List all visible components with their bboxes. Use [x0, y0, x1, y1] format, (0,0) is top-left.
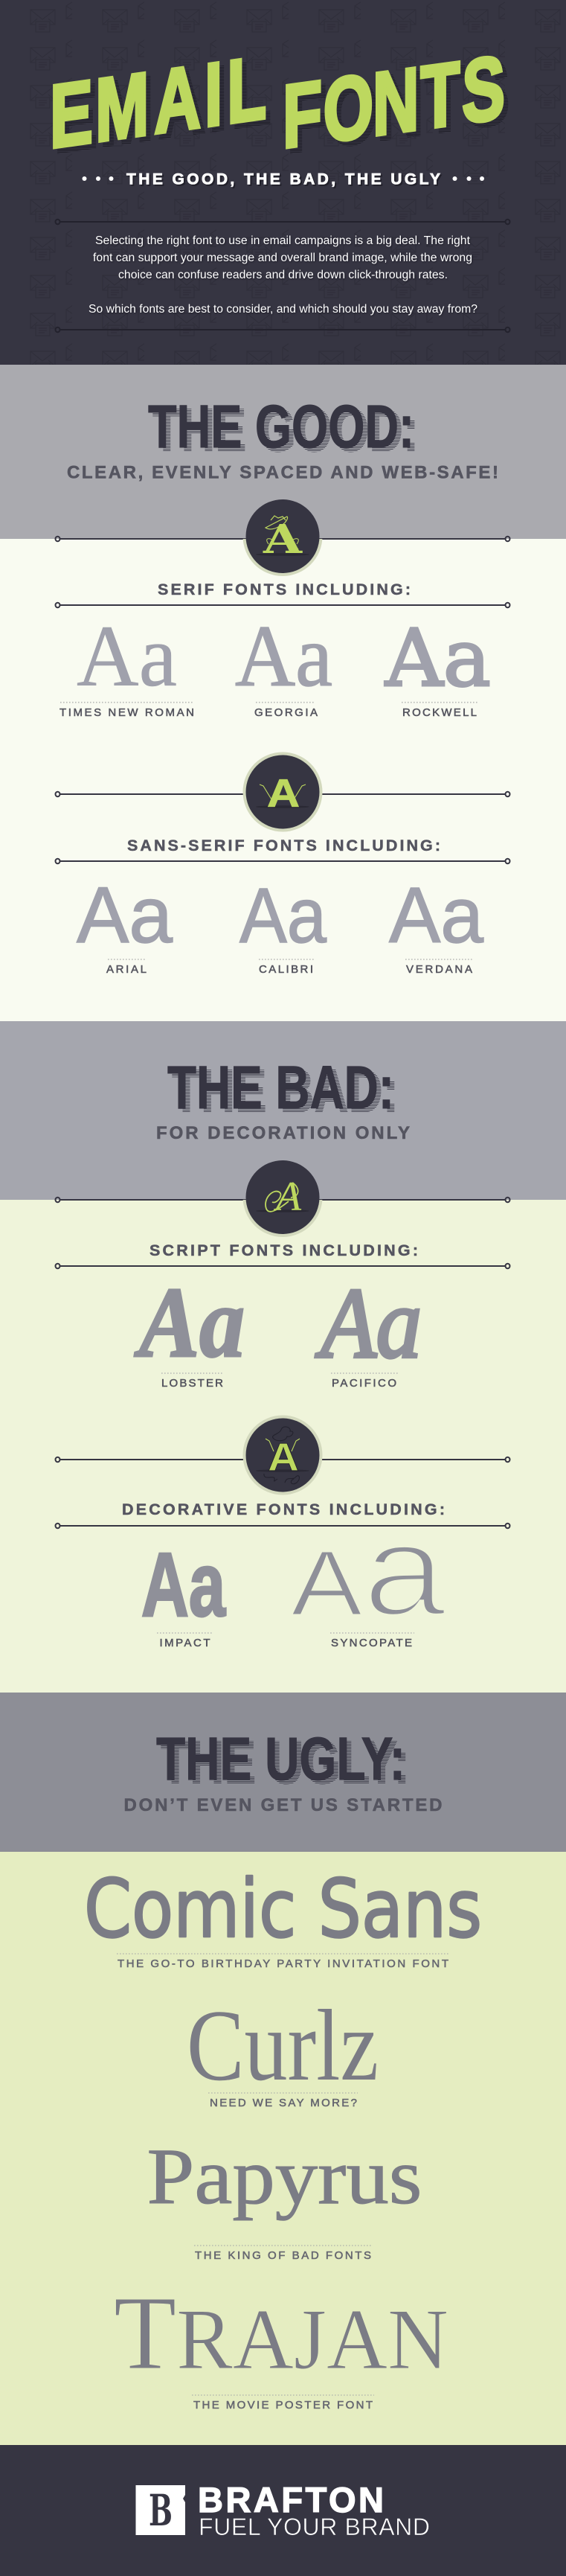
subtitle with dots: THE GOOD, THE BAD, THE UGLY [126, 171, 440, 188]
icon: script A: A [273, 1174, 302, 1220]
sample: Papyrus: Papyrus [147, 2133, 422, 2221]
intro text: So which fonts are best to consider, and which should you stay away from? [89, 303, 477, 316]
sample: Times New Roman: TIMES NEW ROMAN [60, 706, 194, 719]
panel: serif and sans-serif fonts [0, 496, 566, 1021]
panel: footer [0, 2445, 566, 2576]
subheading: don't even get us started: DON’T EVEN GET US STARTED [123, 1795, 442, 1815]
heading: serif fonts: SERIF FONTS INCLUDING: [158, 581, 411, 598]
sample: Comic Sans: Comic Sans [84, 1863, 482, 1956]
intro text: Selecting the right font to use in email campaigns is a big deal. The right [95, 234, 471, 247]
sample: Papyrus [147, 2133, 422, 2262]
title: Email Fonts: EMAIL [50, 38, 266, 167]
sample: Pacifico: Aa [315, 1268, 422, 1379]
sample: Verdana: Aa [389, 872, 483, 959]
sample: Curlz: Curlz [187, 1989, 379, 2102]
panel: ugly fonts [0, 1852, 566, 2445]
sample: Pacifico: PACIFICO [332, 1377, 396, 1390]
heading: the bad: THE BAD: [167, 1054, 394, 1122]
sample: Verdana: VERDANA [406, 963, 472, 976]
icon: serif A with hat [242, 496, 323, 576]
sample: Lobster: LOBSTER [161, 1377, 223, 1390]
intro text: choice can confuse readers and drive down click-through rates. [118, 269, 448, 281]
panel: the bad heading [0, 1021, 566, 1200]
heading: script fonts: SCRIPT FONTS INCLUDING: [149, 1241, 418, 1259]
intro text: font can support your message and overall brand image, while the wrong [93, 252, 472, 264]
sample: Rockwell: ROCKWELL [402, 706, 477, 719]
title: Email Fonts: FONTS [283, 37, 505, 167]
icon: sans-serif A: A [267, 772, 300, 816]
brand name: BRAFTON [198, 2480, 384, 2519]
sample: Arial: Aa [77, 870, 173, 959]
sample: Impact: IMPACT [159, 1637, 210, 1649]
sample: Syncopate: Aa [291, 1498, 447, 1643]
sample: Papyrus: THE KING OF BAD FONTS [195, 2249, 371, 2262]
icon: sans-serif A [242, 752, 323, 832]
icon: Brafton logo: B [149, 2485, 173, 2536]
heading: the good: THE GOOD: [148, 393, 414, 461]
sample: Georgia: GEORGIA [254, 706, 318, 719]
sample: Comic Sans: THE GO-TO BIRTHDAY PARTY INVITATION FONT [118, 1957, 448, 1970]
heading: decorative fonts: DECORATIVE FONTS INCLUDING: [122, 1500, 445, 1518]
sample: Impact [141, 1534, 226, 1649]
sample: Lobster: Aa [135, 1268, 245, 1378]
sample: Impact: Aa [141, 1534, 226, 1635]
icon: script A [242, 1157, 323, 1237]
panel: the good heading [0, 365, 566, 539]
sample: Rockwell: Aa [385, 613, 491, 704]
sample: Syncopate: SYNCOPATE [331, 1637, 412, 1649]
icon: serif A with hat: A [263, 517, 303, 563]
sample: Trajan: TRAJAN [114, 2274, 448, 2391]
panel: header [0, 0, 566, 365]
sample: Curlz: NEED WE SAY MORE? [210, 2097, 357, 2109]
sample: Calibri: Aa [239, 872, 327, 959]
heading: sans-serif fonts: SANS-SERIF FONTS INCLUDING: [127, 837, 440, 854]
panel: script and decorative fonts [0, 1157, 566, 1693]
intro text [89, 234, 477, 316]
sample: Arial: ARIAL [106, 963, 147, 976]
sample: Times New Roman: Aa [77, 607, 177, 705]
heading: the ugly: THE UGLY: [156, 1725, 405, 1793]
subheading: for decoration only: FOR DECORATION ONLY [156, 1123, 410, 1143]
sample: Calibri: CALIBRI [259, 963, 313, 976]
icon: decorative A [242, 1416, 323, 1495]
panel: the ugly heading [0, 1693, 566, 1852]
title: Email Fonts [50, 37, 505, 167]
subheading: clear, evenly spaced: CLEAR, EVENLY SPACED AND WEB-SAFE! [67, 463, 498, 482]
tagline: FUEL YOUR BRAND [199, 2513, 430, 2540]
icon: decorative A: A [268, 1436, 299, 1480]
sample: Times New Roman [60, 607, 194, 719]
sample: Georgia: Aa [235, 607, 332, 705]
sample: Trajan: THE MOVIE POSTER FONT [193, 2399, 373, 2412]
